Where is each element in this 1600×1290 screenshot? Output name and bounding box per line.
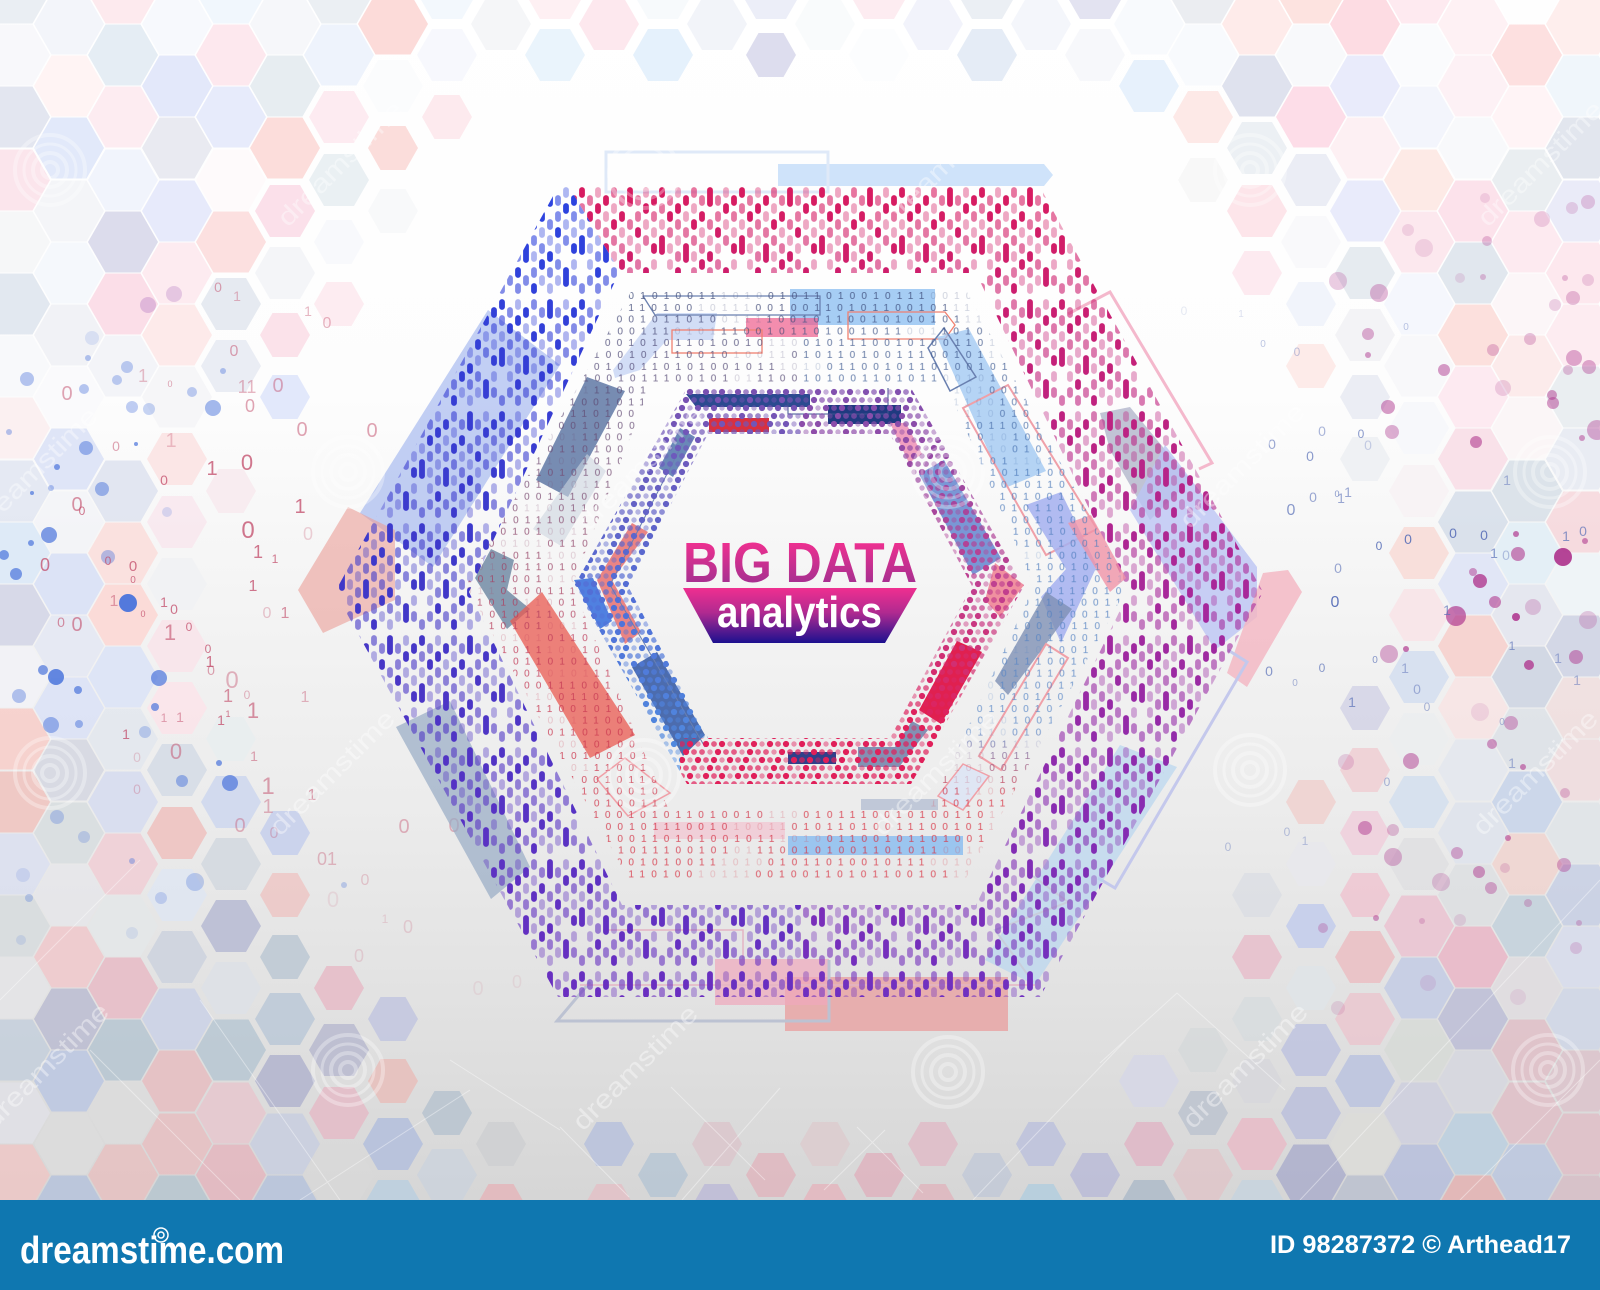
scattered binary digits left: 0 — [448, 815, 460, 837]
scattered binary digits left: 0 — [327, 887, 339, 912]
scattered binary digits right: 0 — [1268, 436, 1276, 452]
scattered binary digits right: 0 — [1306, 448, 1314, 464]
scattered binary digits right: 1 — [1562, 528, 1570, 544]
panel: bottom salmon — [785, 977, 1008, 1031]
scattered binary digits right: 0 — [1292, 678, 1298, 689]
watermark text: dreamstime — [571, 398, 709, 536]
scattered binary digits right: 0 — [1284, 825, 1291, 839]
scattered binary digits left: 0 — [272, 375, 284, 397]
watermark text: dreamstime — [271, 94, 409, 232]
scattered binary digits right: 1 — [1238, 309, 1244, 320]
panel: blue small left — [574, 578, 612, 629]
inner halftone hexagon ring — [560, 380, 1040, 790]
scattered binary digits left: 1 — [176, 709, 184, 725]
scattered binary digits right: 0 — [1287, 502, 1296, 519]
scattered binary digits right: 0 — [1225, 840, 1232, 854]
footer image credit: ID 98287372 © Arthead17 — [1270, 1231, 1571, 1259]
scattered binary digits left: 0 — [40, 555, 50, 575]
scattered binary digits left: 0 — [112, 438, 120, 454]
watermark text: dreamstime — [866, 703, 1004, 841]
scattered binary digits left: 0 — [129, 558, 137, 575]
scattered binary digits left: 0 — [167, 379, 173, 389]
scattered binary digits left: 0 — [160, 472, 168, 488]
scattered binary digits left: 1 — [160, 594, 168, 610]
scattered binary digits left: 1 — [261, 773, 275, 800]
scattered binary digits right: 1 — [1503, 472, 1511, 488]
panel: top blue — [790, 289, 935, 325]
scattered binary digits right: 0 — [1334, 489, 1340, 499]
scattered binary digits left: 1 — [223, 686, 233, 706]
outline: lower left pink — [597, 758, 670, 816]
footer background — [0, 1200, 1600, 1290]
watermark spirals — [15, 135, 1585, 1107]
scattered binary digits left: 1 — [382, 912, 389, 926]
panel: left small slate — [475, 549, 530, 629]
panel: right lavender — [1130, 445, 1257, 650]
panel: right blue chevron — [1026, 492, 1097, 643]
outer binary-dot hexagon ring — [339, 187, 1262, 997]
scattered binary digits left: 0 — [71, 614, 83, 636]
scattered binary digits left: 0 — [170, 739, 182, 764]
panel: top faint outline — [606, 152, 828, 192]
scattered binary digits left: 0 — [170, 601, 178, 617]
scattered binary digits right: 1 — [1508, 755, 1516, 771]
scattered binary digits left: 1 — [281, 605, 290, 622]
scattered binary digits left: 1 — [161, 711, 168, 725]
scattered binary digits right: 0 — [1358, 427, 1365, 441]
scattered binary digits left — [40, 279, 522, 1000]
panel: right lavender outline — [1098, 650, 1247, 888]
watermark text: dreamstime — [876, 94, 1014, 232]
scattered binary digits left: 0 — [403, 917, 413, 937]
scattered binary digits left: 0 — [230, 343, 239, 360]
watermark text: dreamstime — [566, 998, 704, 1136]
scattered binary digits left: 11 — [238, 377, 256, 397]
outline: lower small pink — [938, 764, 989, 810]
middle ring translucent panels — [475, 289, 1126, 855]
scattered binary digits left: 1 — [294, 496, 306, 518]
panel: salmon left chevron — [597, 523, 648, 644]
scattered binary digits left: 1 — [206, 654, 215, 671]
scattered binary digits right: 0 — [1372, 655, 1378, 666]
scattered binary digits left: 1 — [217, 712, 225, 728]
outline: salmon top — [672, 330, 762, 353]
panel: left slate — [536, 377, 625, 497]
scattered binary digits left: 0 — [263, 605, 272, 622]
panel: top pink — [746, 318, 818, 337]
scattered binary digits right: 1 — [1443, 602, 1451, 618]
scattered binary digits left: 0 — [225, 667, 239, 694]
scattered binary digits right: 0 — [1331, 594, 1340, 611]
scattered binary digits left: 0 — [303, 524, 313, 544]
scattered binary digits right: 0 — [1294, 345, 1301, 359]
scattered binary digits left: 0 — [214, 279, 222, 295]
panel: left salmon large — [510, 592, 635, 758]
panel: pink upper right — [890, 423, 922, 463]
panel: right pink outline — [1068, 292, 1212, 469]
panel: lower right light blue — [985, 745, 1177, 985]
banner trapezoid — [683, 588, 917, 643]
scattered binary digits left: 1 — [206, 458, 218, 480]
outline: thin navy — [788, 388, 888, 414]
scattered binary digits left: 0 — [241, 517, 255, 544]
scattered binary digits left: 0 — [323, 315, 332, 332]
scattered binary digits right: 0 — [1579, 523, 1587, 539]
panel: navy top bar — [686, 394, 810, 407]
scattered blue dots left — [0, 286, 347, 945]
binary digit hexagon ring — [467, 292, 1122, 878]
panel: right lower slate — [995, 592, 1072, 695]
scattered binary digits left: 1 — [250, 748, 258, 764]
footer logo text: dreamstime.com — [20, 1230, 284, 1272]
outline: slate top — [643, 296, 820, 315]
scattered binary digits right — [1181, 304, 1587, 854]
scattered binary digits right: 0 — [1424, 700, 1431, 714]
scattered binary digits right: 1 — [1302, 834, 1309, 848]
scattered binary digits right: 1 — [1509, 639, 1516, 653]
panel: left salmon — [298, 507, 395, 633]
banner text: analytics — [717, 588, 882, 637]
scattered binary digits right: 0 — [1499, 717, 1505, 728]
scattered binary digits left: 0 — [244, 688, 251, 702]
scattered binary digits left: 0 — [270, 825, 279, 842]
watermark text: dreamstime — [1471, 94, 1600, 232]
scattered binary digits right: 0 — [1403, 322, 1409, 333]
scattered binary digits left: 1 — [122, 726, 130, 742]
panel: red bar — [709, 418, 769, 432]
scattered binary digits left: 0 — [105, 554, 112, 568]
outline: long salmon — [963, 385, 1097, 555]
footer bar — [0, 1200, 1600, 1290]
panel: bottom blue — [788, 836, 963, 855]
scattered binary digits left: 1 — [165, 430, 177, 452]
panel: bottom grey outline — [557, 960, 829, 1021]
scattered binary digits right: 0 — [1480, 527, 1488, 543]
scattered binary digits left: 1 — [262, 796, 274, 818]
scattered binary digits left: 0 — [241, 450, 253, 475]
outer ring translucent panels — [298, 152, 1302, 1031]
scattered binary digits right: 1 — [1573, 672, 1581, 688]
panel: right salmon — [1227, 570, 1302, 687]
scattered binary digits left: 1 — [164, 620, 176, 645]
banner: analytics — [683, 588, 917, 643]
panel: top light blue chevron — [778, 164, 1053, 186]
panel: left lower slate — [396, 701, 530, 899]
panel: pink chevron — [985, 563, 1024, 617]
panel: crimson — [919, 641, 982, 724]
panel: left pale — [533, 454, 606, 546]
scattered binary digits left: 1 — [233, 288, 241, 304]
scattered binary digits left: 0 — [71, 494, 83, 516]
footer logo spiral — [154, 1228, 168, 1242]
outline: salmon chevron — [848, 312, 955, 339]
outline: lower right pink — [979, 644, 1068, 770]
scattered binary digits right: 0 — [1309, 489, 1317, 505]
panel: left blue — [360, 310, 560, 567]
scattered binary digits right: 1 — [1490, 545, 1498, 561]
scattered binary digits right: 0 — [1181, 304, 1188, 318]
panel: right pink — [1068, 515, 1126, 592]
panel: bottom pink — [715, 959, 829, 1005]
scattered binary digits left: 1 — [249, 578, 258, 595]
scattered binary digits left: 0 — [366, 420, 378, 442]
scattered binary digits left: 0 — [205, 642, 212, 656]
panel: navy small — [788, 752, 836, 764]
panel: blue lower left — [632, 652, 705, 756]
scattered binary digits right: 0 — [1384, 775, 1391, 789]
panel: lower right outline — [995, 876, 1068, 982]
scattered binary digits right: 0 — [1334, 560, 1342, 576]
scattered binary digits right: 0 — [1502, 547, 1510, 563]
scattered binary digits left: 0 — [130, 575, 136, 586]
panel: slate lower right — [858, 721, 928, 767]
watermark text: dreamstime — [1173, 396, 1311, 534]
scattered binary digits left: 1 — [110, 593, 119, 610]
panel: bottom pink — [654, 822, 785, 839]
scattered binary digits left: 0 — [512, 972, 522, 992]
scattered binary digits right: 1 — [1401, 660, 1409, 676]
scattered binary digits left: 0 — [79, 504, 86, 518]
scattered binary digits left: 0 — [207, 662, 215, 678]
scattered binary digits right: 0 — [1265, 663, 1273, 679]
panel: small slate — [659, 428, 695, 477]
scattered binary digits right: 1 — [1554, 650, 1562, 666]
scattered binary digits left: 0 — [234, 815, 246, 837]
scattered magenta dots right — [1318, 193, 1600, 1015]
scattered binary digits right: 0 — [1318, 423, 1326, 439]
scattered binary digits left: 0 — [186, 620, 193, 634]
scattered binary digits left: 0 — [354, 946, 364, 966]
scattered binary digits left: 1 — [247, 698, 259, 723]
scattered binary digits left: 0 — [57, 614, 65, 630]
scattered binary digits left: 1 — [272, 552, 279, 566]
panel: bottom grey — [861, 799, 938, 810]
scattered binary digits left: 0 — [398, 816, 410, 838]
panel: right grey — [1100, 407, 1190, 520]
panel: top-left lavender — [613, 313, 717, 378]
watermark diagonal lines — [0, 860, 1600, 1200]
scattered binary digits left: 0 — [361, 872, 370, 889]
scattered binary digits right: 1 — [1348, 694, 1356, 710]
scattered binary digits left: 0 — [61, 383, 73, 405]
scattered binary digits left: 0 — [245, 396, 255, 416]
scattered binary digits right: 0 — [1449, 525, 1457, 541]
panel: blue right — [919, 460, 1001, 575]
watermark text: dreamstime — [1466, 703, 1600, 841]
panel: bottom thin outlines — [580, 930, 1035, 985]
panel: navy right bar — [828, 405, 901, 424]
scattered binary digits left: 0 — [133, 749, 141, 765]
scattered binary digits left: 0 — [296, 419, 308, 441]
scattered binary digits right: 0 — [1404, 531, 1412, 547]
scattered binary digits left: 0 — [140, 609, 146, 619]
scattered binary digits right: 1 — [1337, 490, 1345, 506]
inner ring panels — [574, 388, 1024, 767]
scattered binary digits left: 1 — [301, 689, 310, 706]
scattered binary digits left: 0 — [472, 978, 484, 1000]
scattered binary digits left: 1 — [253, 542, 263, 562]
scattered binary digits right: 0 — [1260, 339, 1266, 350]
scattered binary digits left: 1 — [225, 709, 231, 719]
scattered binary digits left: 1 — [304, 303, 312, 319]
scattered binary digits right: 0 — [1376, 539, 1383, 553]
title: BIG DATA: BIG DATA — [683, 531, 917, 595]
scattered binary digits left: 01 — [317, 849, 337, 869]
scattered binary digits right: 0 — [1364, 437, 1372, 453]
watermark text: dreamstime — [1176, 996, 1314, 1134]
scattered binary digits left: 0 — [133, 781, 141, 797]
outline: small slate — [928, 328, 976, 391]
outline: thin left — [610, 431, 705, 747]
scattered binary digits right: 0 — [1319, 661, 1326, 675]
watermark text: dreamstime — [263, 703, 401, 841]
scattered binary digits right: 0 — [1413, 681, 1421, 697]
scattered binary digits right: 1 — [1344, 484, 1352, 500]
scattered binary digits left: 1 — [308, 787, 317, 804]
panel: top-right blue — [937, 329, 1046, 488]
scattered binary digits left: 1 — [138, 366, 148, 386]
